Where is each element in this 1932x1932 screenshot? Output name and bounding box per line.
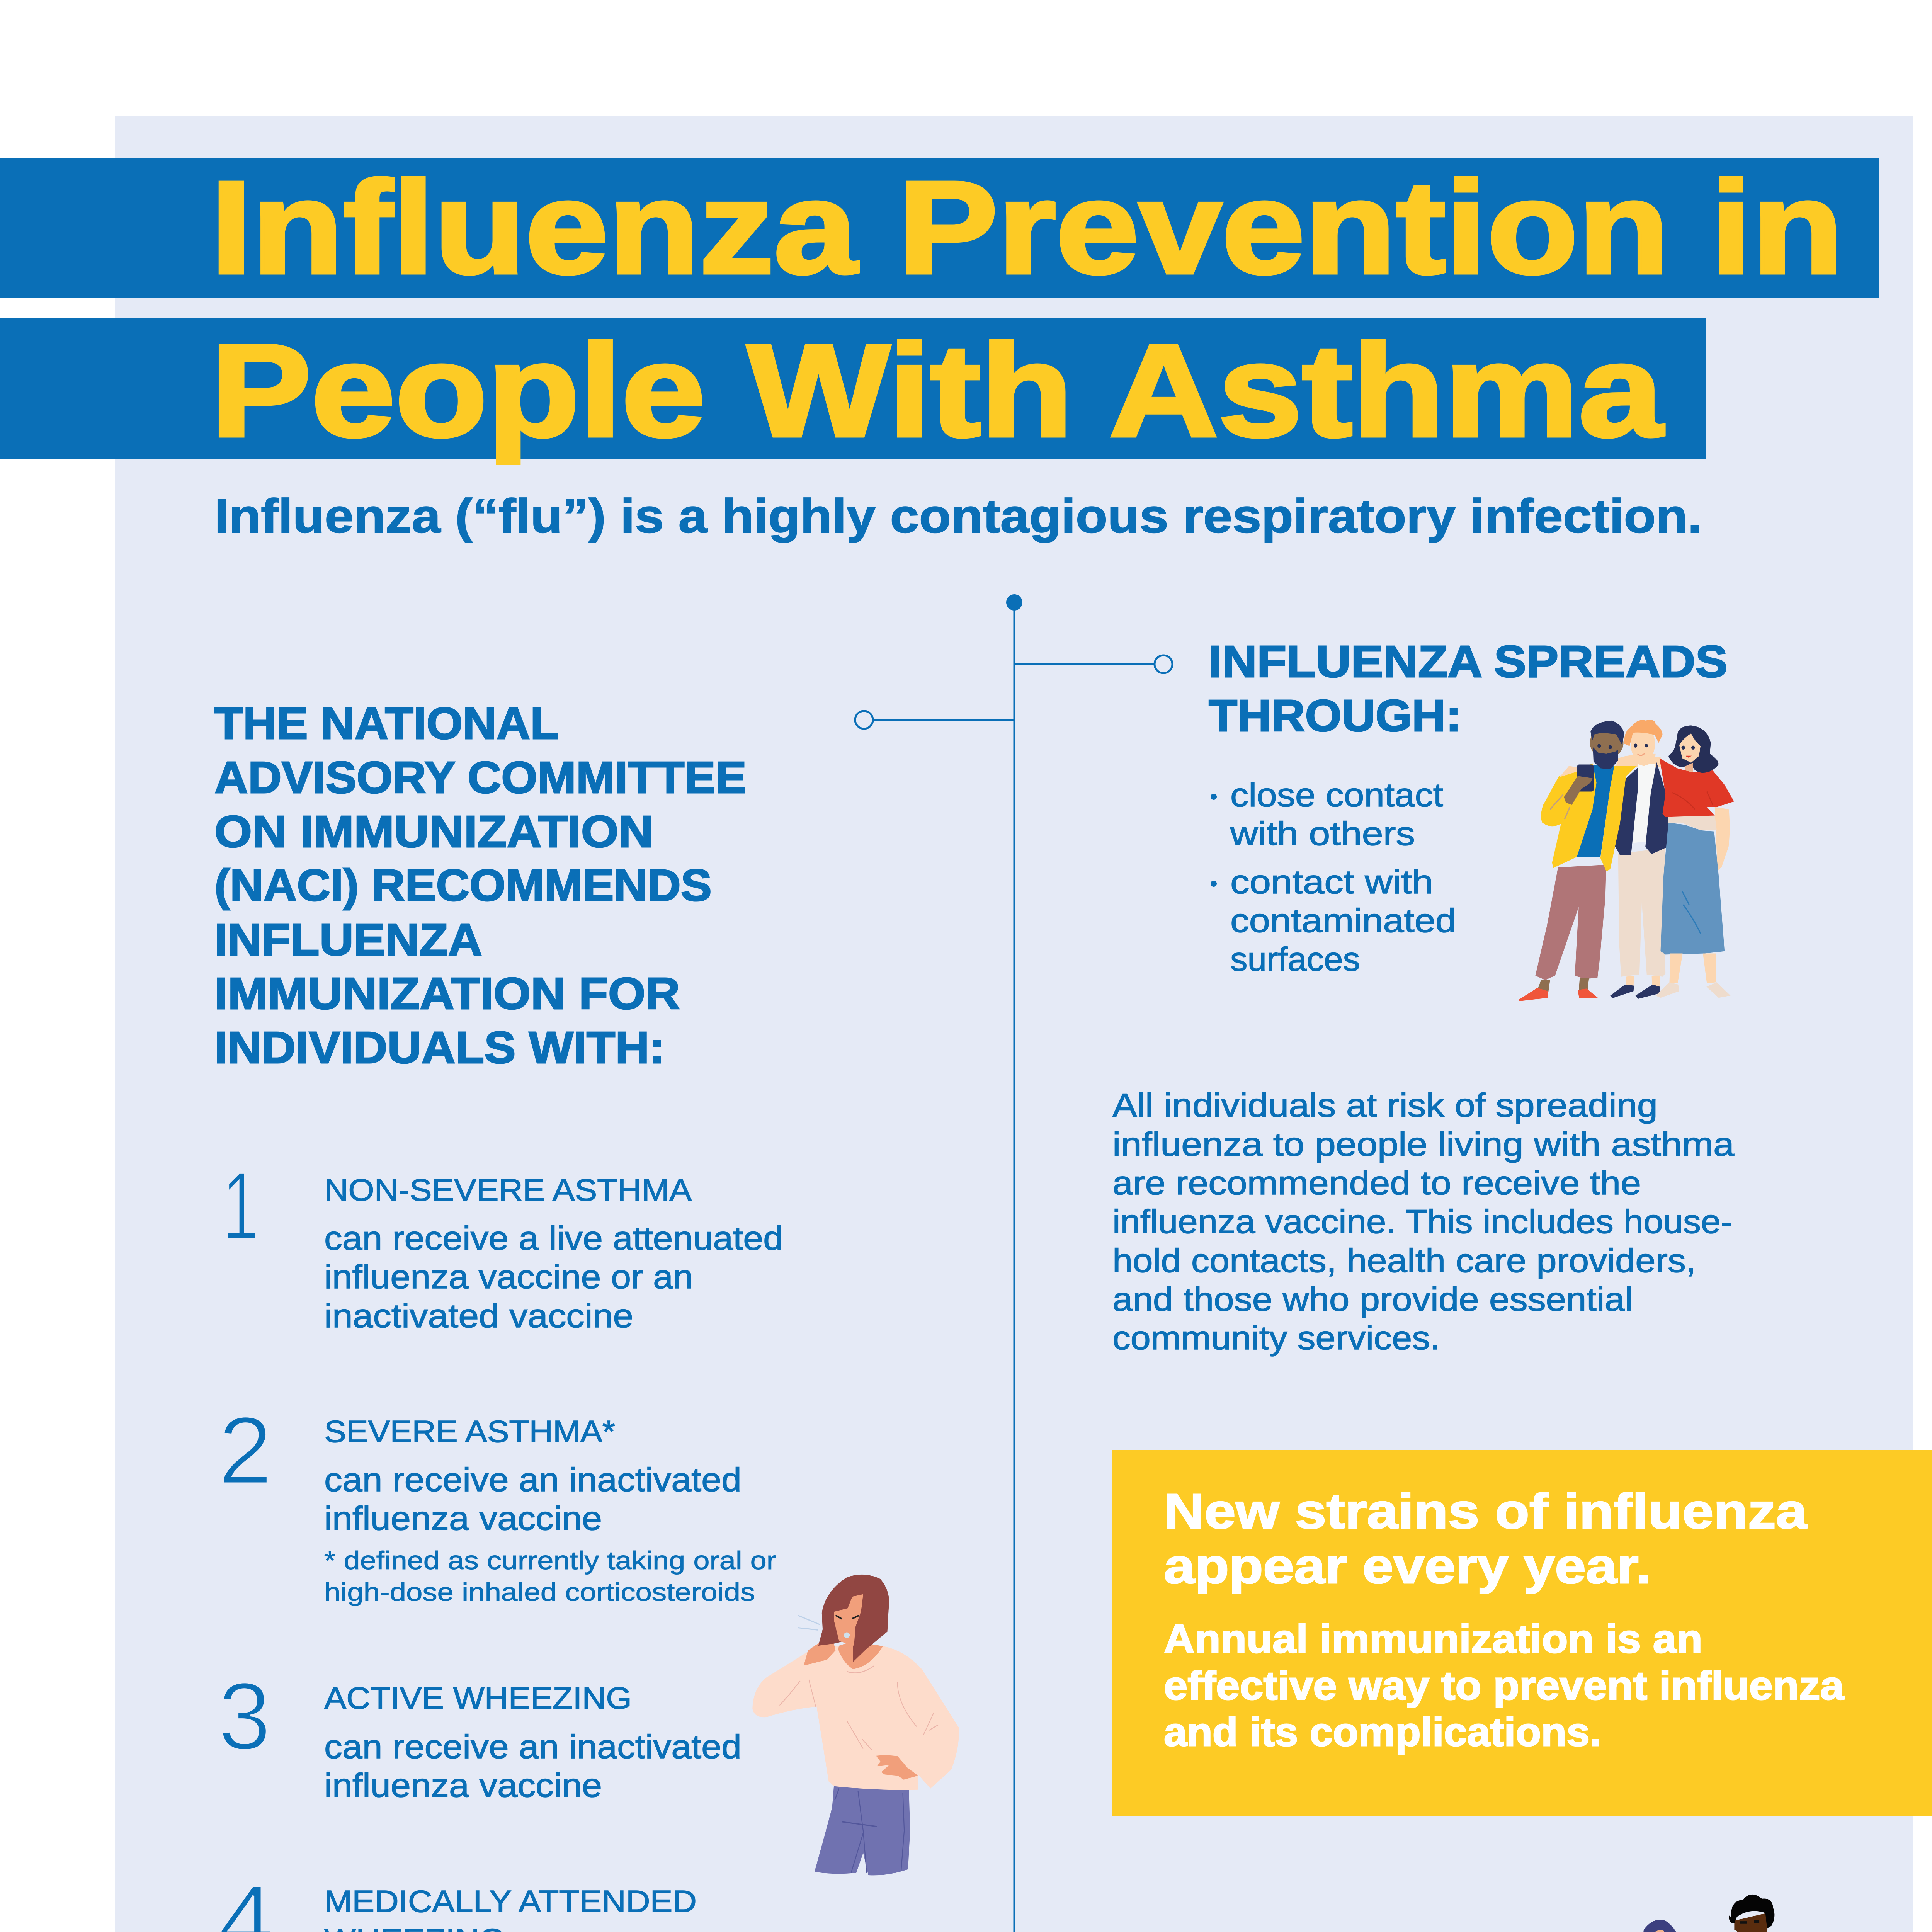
heading: NACI recommendation	[214, 698, 747, 1073]
list item 1: influenza vaccine or an	[324, 1259, 693, 1296]
heading: influenza spreads through: INFLUENZA SPREADS	[1209, 636, 1728, 687]
list item 3: ACTIVE WHEEZING	[324, 1681, 632, 1715]
list item 2: 2	[218, 1396, 272, 1504]
paragraph: individuals at risk: hold contacts, health care providers,	[1112, 1242, 1696, 1279]
bulleted list: ways of spreading: with others	[1230, 815, 1415, 852]
list item 1: NON-SEVERE ASTHMA	[324, 1173, 692, 1207]
paragraph: individuals at risk	[1112, 1087, 1734, 1357]
subtitle: Influenza (“flu”) is a highly contagious respiratory infection.	[214, 490, 1702, 543]
bulleted list: ways of spreading	[1211, 777, 1456, 978]
paragraph: individuals at risk: influenza to people living with asthma	[1112, 1126, 1734, 1163]
list item 2: * defined as currently taking oral or	[324, 1546, 776, 1575]
bulleted list: ways of spreading: contact with	[1230, 864, 1433, 901]
heading: influenza spreads through	[1209, 636, 1728, 741]
paragraph: individuals at risk: community services.	[1112, 1320, 1440, 1357]
heading: NACI recommendation: (NACI) RECOMMENDS	[214, 860, 712, 910]
list item 3: can receive an inactivated	[324, 1728, 742, 1765]
heading: influenza spreads through: THROUGH:	[1209, 690, 1461, 741]
callout: new strains: New strains of influenza	[1164, 1484, 1808, 1539]
list item 3: influenza vaccine	[324, 1767, 602, 1804]
list item 2: SEVERE ASTHMA*	[324, 1414, 615, 1449]
paragraph: individuals at risk: are recommended to receive the	[1112, 1165, 1641, 1202]
callout: new strains: Annual immunization is an	[1164, 1617, 1702, 1662]
illustration: coughing woman	[752, 1575, 959, 1875]
heading: NACI recommendation: INDIVIDUALS WITH:	[214, 1022, 665, 1073]
paragraph: individuals at risk: and those who provide essential	[1112, 1281, 1633, 1318]
list item 4: MEDICALLY ATTENDED	[324, 1884, 697, 1918]
title line 2: People With Asthma	[211, 317, 1663, 464]
list item 2: can receive an inactivated	[324, 1461, 742, 1498]
heading: NACI recommendation: ON IMMUNIZATION	[214, 806, 653, 857]
list item 1: inactivated vaccine	[324, 1298, 633, 1335]
title line 1: Influenza Prevention in	[211, 154, 1843, 301]
title banner	[0, 154, 1879, 464]
paragraph: individuals at risk: influenza vaccine. This includes house-	[1112, 1203, 1733, 1240]
list item 1	[222, 1152, 783, 1335]
heading: NACI recommendation: INFLUENZA	[214, 915, 482, 965]
list item 4	[218, 1865, 825, 1932]
heading: NACI recommendation: IMMUNIZATION FOR	[214, 968, 680, 1019]
bulleted list: ways of spreading: surfaces	[1230, 941, 1360, 978]
list item 3: 3	[218, 1662, 271, 1770]
list item 1: 1	[222, 1152, 259, 1259]
timeline with connectors	[855, 594, 1172, 1932]
callout: new strains: effective way to prevent influenza	[1164, 1663, 1844, 1708]
heading: NACI recommendation: ADVISORY COMMITTEE	[214, 752, 747, 803]
paragraph: individuals at risk: All individuals at risk of spreading	[1112, 1087, 1658, 1124]
callout: new strains	[1112, 1450, 1932, 1816]
bulleted list: ways of spreading: contaminated	[1230, 902, 1456, 939]
callout: new strains: appear every year.	[1164, 1539, 1651, 1594]
callout: new strains: and its complications.	[1164, 1710, 1601, 1755]
illustration: health care providers	[1621, 1895, 1806, 1932]
title bar line 2	[0, 318, 1706, 459]
bulleted list: ways of spreading: close contact	[1230, 777, 1443, 814]
list item 3	[218, 1662, 742, 1804]
heading: NACI recommendation: THE NATIONAL	[214, 698, 559, 748]
list item 1: can receive a live attenuated	[324, 1220, 783, 1257]
list item 2	[218, 1396, 776, 1606]
title bar line 1	[0, 158, 1879, 298]
illustration: three friends	[1518, 720, 1734, 1001]
list item 2: high-dose inhaled corticosteroids	[324, 1578, 755, 1606]
list item 2: influenza vaccine	[324, 1500, 602, 1537]
